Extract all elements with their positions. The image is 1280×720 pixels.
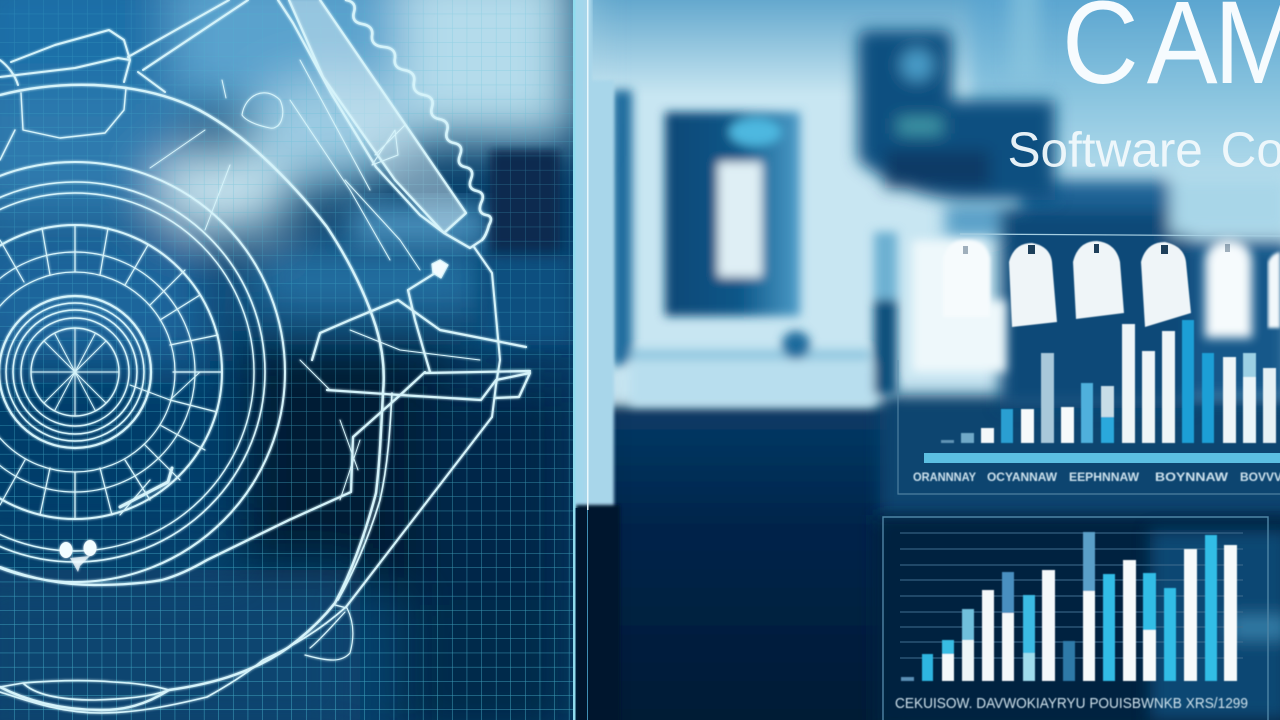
chart frame <box>898 360 1280 494</box>
hanging cord <box>960 234 1280 236</box>
white blobs <box>60 540 96 572</box>
subtitle: Software Co <box>1008 122 1280 178</box>
tag 6 <box>1268 252 1280 328</box>
outer housing second line <box>0 607 346 713</box>
right outline <box>474 247 500 417</box>
upper bars <box>941 320 1276 443</box>
tag pins <box>963 244 1230 254</box>
top-left box <box>0 88 126 160</box>
lower bars <box>901 532 1237 681</box>
wireframe: mechanical part drawing <box>0 0 530 713</box>
tag 1 <box>943 240 990 317</box>
panel divider lines <box>573 0 620 720</box>
lower chart: panel <box>883 517 1268 720</box>
tag 3 <box>1073 241 1124 319</box>
sketch circle <box>242 93 283 128</box>
lower oval <box>0 681 169 700</box>
lower axis label: CEKUISOW. DAVWOKIAYRYU POUISBWNKB XRS/1299 <box>895 695 1248 712</box>
sketch lines <box>150 80 420 270</box>
blade detail <box>290 60 405 260</box>
upper axis labels: EEPHNNAW <box>1069 470 1140 484</box>
tag 4 <box>1141 242 1191 327</box>
arm <box>312 270 530 400</box>
diagonal bar <box>128 0 248 92</box>
blade <box>278 0 482 248</box>
upper axis labels: ORANNNAY <box>913 470 976 484</box>
knot <box>432 260 448 278</box>
serpentine wave <box>346 0 491 240</box>
blueprint grid <box>0 0 574 720</box>
hub rings <box>0 296 151 448</box>
chart frame <box>883 517 1268 720</box>
upper chart: panel <box>898 234 1280 494</box>
tag 5 <box>1205 240 1252 338</box>
upper axis labels: OCYANNAW <box>987 470 1058 484</box>
teardrop <box>305 605 353 660</box>
top-left bump <box>0 30 130 85</box>
wheel outer rings <box>0 162 285 582</box>
arm fill detail <box>300 330 480 500</box>
wheel segment spokes <box>0 225 222 519</box>
cyan baseline band <box>924 453 1280 463</box>
lower thick contour <box>0 372 425 585</box>
upper axis labels: BOYNNAW <box>1155 470 1229 484</box>
grid lines <box>900 533 1243 658</box>
left blueprint panel background <box>0 0 574 720</box>
upper axis labels <box>913 470 1280 484</box>
outer housing arc <box>0 85 384 710</box>
diagonal right strut <box>346 417 492 607</box>
blade body <box>289 0 466 233</box>
tag 2 <box>1009 243 1057 327</box>
